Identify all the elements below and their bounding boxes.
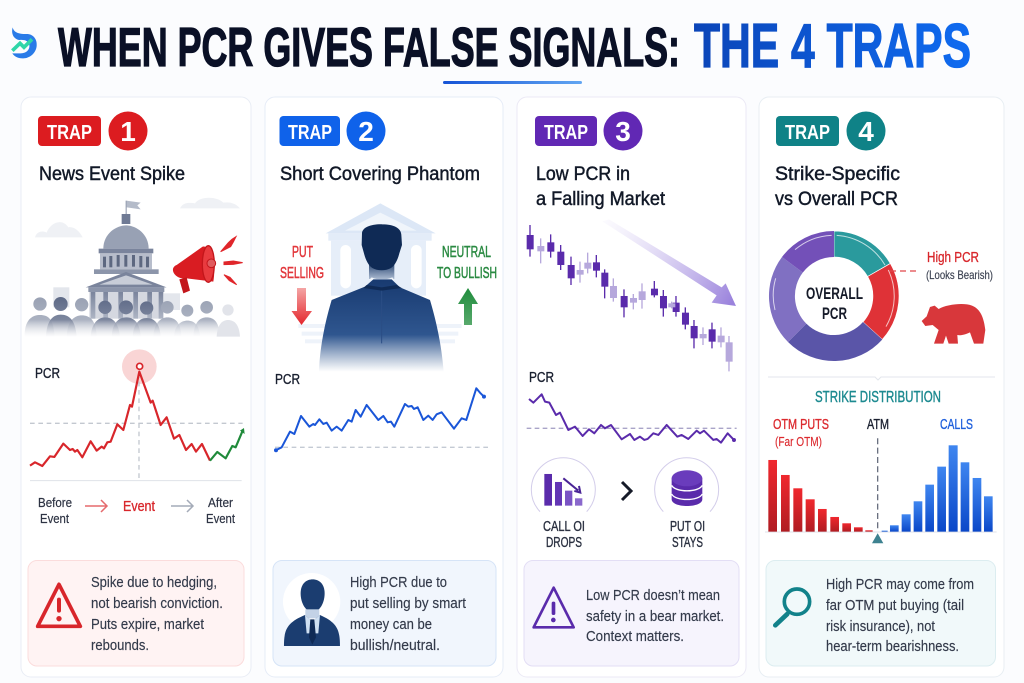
illustration: capitol and crowd xyxy=(25,198,240,337)
icon: magnifying glass xyxy=(775,589,810,625)
callout text: put selling by smart xyxy=(350,596,466,612)
trap 4 badge: 4 xyxy=(858,116,874,147)
trap 4 heading: vs Overall PCR xyxy=(775,189,898,210)
timeline: before, event, after: Before xyxy=(38,495,72,510)
icon: warning triangle purple xyxy=(534,588,574,627)
candlestick chart with falling arrow xyxy=(527,219,736,371)
trap 4 badge xyxy=(776,112,886,150)
callout: trap 1 xyxy=(28,560,244,666)
callout text: not bearish conviction. xyxy=(91,596,223,612)
trap 2 badge: 2 xyxy=(358,116,374,147)
label: put selling with arrow xyxy=(280,244,324,325)
callout text: Puts expire, market xyxy=(91,617,204,633)
trap 1 badge: 1 xyxy=(120,116,136,147)
title: WHEN PCR GIVES FALSE SIGNALS: xyxy=(58,16,680,78)
label: call OI drops xyxy=(543,519,585,551)
donut label: OVERALL xyxy=(806,284,863,303)
callout text: far OTM put buying (tail xyxy=(826,598,964,614)
donut label xyxy=(806,284,863,323)
chart: PCR line trap 3 xyxy=(527,394,737,443)
label: put OI stays: PUT OI xyxy=(670,519,705,535)
callout: trap 2 xyxy=(273,560,496,666)
bar chart labels: ATM xyxy=(867,416,889,433)
chart label: PCR xyxy=(529,369,554,386)
label: neutral to bullish with arrow xyxy=(437,244,497,325)
label: neutral to bullish with arrow: TO BULLISH xyxy=(437,265,497,282)
label: put selling with arrow: SELLING xyxy=(280,265,324,282)
trap 3 heading: Low PCR in xyxy=(536,164,630,185)
callout: high PCR looks bearish: (Looks Bearish) xyxy=(926,268,993,282)
trap 2 badge xyxy=(280,112,386,150)
callout text: Low PCR doesn’t mean xyxy=(586,588,720,604)
callout: trap 4 xyxy=(766,560,996,666)
trap 4 badge: TRAP xyxy=(785,122,830,144)
timeline: before, event, after: After xyxy=(208,495,234,510)
label: put selling with arrow: PUT xyxy=(292,244,313,261)
logo icon xyxy=(12,27,37,58)
icon: chevron greater than xyxy=(622,482,631,500)
bar chart labels xyxy=(773,416,973,449)
bar chart labels: OTM PUTS xyxy=(773,416,829,433)
label: put OI stays: STAYS xyxy=(672,535,703,551)
donut label: PCR xyxy=(822,304,847,323)
callout text: bullish/neutral. xyxy=(350,638,440,654)
callout text: Spike due to hedging, xyxy=(91,575,217,591)
panel: trap 1 news event spike xyxy=(21,97,251,677)
chart: PCR event spike xyxy=(30,349,245,481)
trap 4 heading: Strike-Specific xyxy=(775,164,900,185)
trap 1 badge: TRAP xyxy=(47,122,92,144)
callout text: hear-term bearishness. xyxy=(826,639,959,655)
callout text xyxy=(350,575,466,654)
callout text: High PCR due to xyxy=(350,575,447,591)
callout text xyxy=(826,577,974,655)
chart label: PCR xyxy=(35,365,60,382)
icon: call OI drops xyxy=(531,458,595,512)
crowd silhouettes xyxy=(25,297,240,337)
bar chart: strike distribution xyxy=(765,438,997,543)
trap 3 heading xyxy=(536,164,666,210)
chart: PCR line trap 2 xyxy=(274,388,490,452)
timeline: before, event, after: Event xyxy=(206,511,235,526)
callout text: money can be xyxy=(350,617,432,633)
icon: bear xyxy=(922,304,985,344)
callout text: risk insurance), not xyxy=(826,619,935,635)
trap 2 badge: TRAP xyxy=(288,122,332,144)
callout text xyxy=(91,575,223,654)
timeline: before, event, after: Event xyxy=(40,511,69,526)
trap 3 badge xyxy=(535,112,642,150)
panel: trap 4 strike-specific vs overall PCR xyxy=(759,97,1004,677)
trap 3 badge: TRAP xyxy=(544,122,588,144)
icon: businessman xyxy=(283,573,340,646)
callout text: Context matters. xyxy=(586,629,684,645)
trap 1 badge xyxy=(38,112,148,150)
callout text xyxy=(586,588,724,645)
divider with notch xyxy=(768,377,995,380)
strike distribution heading: STRIKE DISTRIBUTION xyxy=(815,389,941,406)
timeline: before, event, after: Event xyxy=(123,499,155,515)
trap 3 badge: 3 xyxy=(615,116,631,147)
callout: high PCR looks bearish: High PCR xyxy=(927,249,979,266)
bar chart labels: (Far OTM) xyxy=(775,435,822,449)
donut chart: overall PCR xyxy=(769,231,899,361)
chart label: PCR xyxy=(275,371,300,388)
callout: trap 3 xyxy=(524,560,739,666)
trap 2 heading: Short Covering Phantom xyxy=(280,164,480,185)
bar chart labels: CALLS xyxy=(940,416,973,433)
callout text: rebounds. xyxy=(91,638,149,654)
trap 3 heading: a Falling Market xyxy=(536,189,666,210)
callout: high PCR looks bearish xyxy=(890,249,993,282)
callout text: safety in a bear market. xyxy=(586,609,724,625)
trap 4 heading xyxy=(775,164,900,210)
icon: warning triangle xyxy=(38,584,80,626)
label: neutral to bullish with arrow: NEUTRAL xyxy=(442,244,491,261)
icon: red megaphone xyxy=(173,237,243,293)
trap 1 heading: News Event Spike xyxy=(39,164,185,185)
label: call OI drops: CALL OI xyxy=(543,519,585,535)
label: call OI drops: DROPS xyxy=(546,535,582,551)
label: put OI stays xyxy=(670,519,705,551)
panel: trap 3 low PCR in a falling market xyxy=(517,97,746,677)
illustration: person before institution xyxy=(298,203,462,372)
timeline: before, event, after xyxy=(38,495,235,526)
callout text: High PCR may come from xyxy=(826,577,974,593)
panel: trap 2 short covering phantom xyxy=(265,97,503,677)
icon: put OI stays database xyxy=(655,458,719,512)
